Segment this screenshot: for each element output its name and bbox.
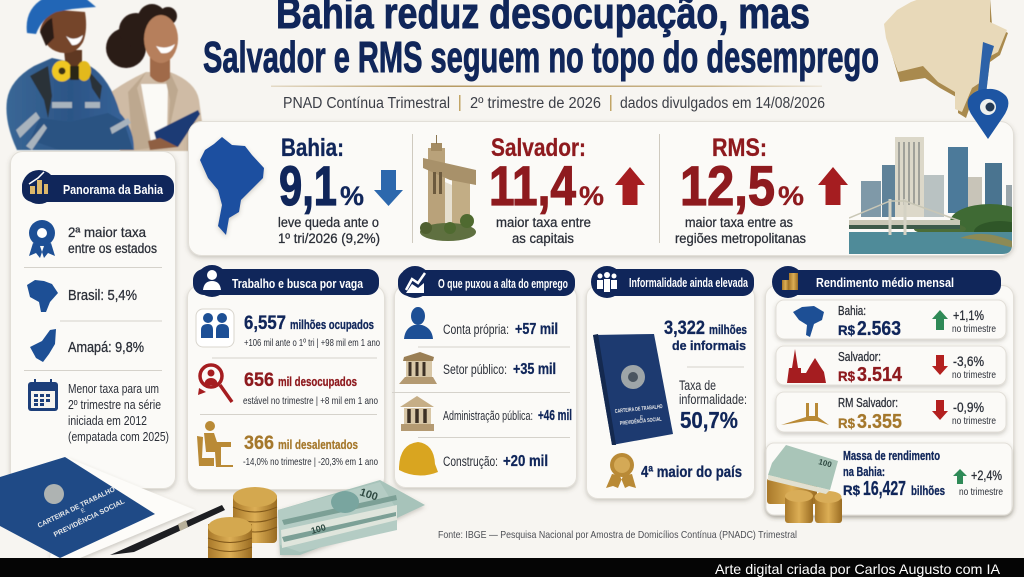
icon: Elevador Lacerda xyxy=(420,135,476,241)
stat: state ranking: entre os estados xyxy=(68,241,157,256)
note: lowest rate: iniciada em 2012 xyxy=(68,413,147,428)
Salvador rate: maior taxa entre xyxy=(496,215,591,230)
stat: informal workers: 3,322 xyxy=(664,318,705,339)
illustration: work booklet: PREVIDÊNCIA SOCIAL xyxy=(619,415,662,427)
woman hair xyxy=(106,4,177,68)
illustration: work booklet xyxy=(593,334,673,445)
icon: coins and banknotes: 100 xyxy=(817,457,833,470)
icon: employed people xyxy=(196,309,234,347)
icon: rosette xyxy=(29,220,55,258)
stat: informal workers xyxy=(664,318,747,353)
arrow down blue xyxy=(374,170,403,206)
panel: Rendimento médio mensal xyxy=(766,266,1014,523)
icon: Brazil map xyxy=(27,280,58,312)
ear muffs xyxy=(52,60,72,82)
stat: discouraged: -14,0% no trimestre | -20,3% em 1 ano xyxy=(243,456,378,468)
Bahia rate: leve queda ante o xyxy=(278,215,379,230)
heading pill xyxy=(193,265,379,297)
credit bar xyxy=(0,558,1024,577)
subtitle xyxy=(283,95,825,112)
heading pill: Panorama da Bahia xyxy=(63,182,164,197)
note: lowest rate: (empatada com 2025) xyxy=(68,429,169,444)
woman blazer xyxy=(111,72,206,151)
worker body xyxy=(6,58,134,150)
row: Construção: Construção: xyxy=(443,454,498,469)
card: Salvador income: 3.514 xyxy=(857,364,903,386)
card: income mass: no trimestre xyxy=(959,486,1003,498)
card: Bahia income xyxy=(776,300,1006,340)
stat: Brasil: Brasil: 5,4% xyxy=(68,288,137,304)
illustration: skyline xyxy=(849,137,1024,255)
illustration: pen xyxy=(110,505,225,555)
stat: informality rate: Taxa de xyxy=(679,378,716,393)
hard hat xyxy=(27,0,96,34)
RMS rate xyxy=(675,134,806,246)
row: Setor público: Setor público: xyxy=(443,362,507,377)
woman face xyxy=(150,55,170,83)
row: Conta própria xyxy=(443,321,558,338)
card: RM Salvador income: RM Salvador: xyxy=(838,396,898,410)
illustration: banknotes: 100 xyxy=(358,486,379,504)
card: RM Salvador income: 3.355 xyxy=(857,411,902,433)
subtitle: PNAD Contínua Trimestral xyxy=(283,95,450,112)
row: Administração pública: +46 mil xyxy=(538,408,572,424)
icon: Amapá map xyxy=(30,329,56,362)
Bahia rate: % xyxy=(340,181,364,211)
stat: discouraged xyxy=(243,433,378,468)
icon: discouraged seated person xyxy=(197,421,233,467)
card: income mass: R$ xyxy=(843,482,860,498)
illustration: coin stacks xyxy=(208,487,277,558)
icon: medal xyxy=(606,453,636,488)
illustration: worker and professional xyxy=(6,0,206,151)
row: Setor público xyxy=(443,361,556,378)
heading pill xyxy=(591,266,754,298)
heading pill xyxy=(22,170,174,204)
arrow up red xyxy=(615,167,645,205)
heading pill: Trabalho e busca por vaga xyxy=(232,276,364,291)
note: lowest rate: 2º trimestre na série xyxy=(68,397,161,412)
icon: construction helmet xyxy=(399,442,438,476)
illustration: work booklet on desk: PREVIDÊNCIA SOCIAL xyxy=(52,496,127,539)
icon: coins and banknotes xyxy=(767,445,842,523)
row: Administração pública: Administração pública: xyxy=(443,408,533,423)
stat: unemployed: 656 xyxy=(244,370,274,391)
stat: discouraged: mil desalentados xyxy=(278,437,358,452)
card: Salvador income: no trimestre xyxy=(952,369,996,381)
card: RM Salvador income xyxy=(776,392,1006,433)
illustration: banknotes xyxy=(278,480,425,555)
heading pill: Informalidade ainda elevada xyxy=(629,275,749,290)
Bahia rate: 1º tri/2026 (9,2%) xyxy=(278,231,380,246)
stat: occupied: 6,557 xyxy=(244,313,286,334)
illustration: banknotes: 100 xyxy=(310,522,327,536)
Bahia map icon xyxy=(200,137,264,235)
card: Bahia income: +1,1% xyxy=(953,308,984,323)
card: Salvador income: R$ xyxy=(838,368,855,384)
illustration: work booklet on desk xyxy=(0,457,195,558)
stat: state ranking: 2ª maior taxa xyxy=(68,224,146,240)
RMS rate: % xyxy=(778,181,804,211)
heading pill: O que puxou a alta do emprego xyxy=(438,276,568,291)
illustration: work booklet on desk: CARTEIRA DE TRABALHO xyxy=(37,486,117,530)
card: Bahia income: Bahia: xyxy=(838,304,866,318)
stat: occupied: milhões ocupados xyxy=(290,317,374,332)
stat: unemployed: estável no trimestre | +8 mil em 1 ano xyxy=(243,395,378,407)
stat: informality rate: informalidade: xyxy=(679,392,747,407)
heading pill: Rendimento médio mensal xyxy=(816,275,954,290)
panel: Panorama da Bahia xyxy=(10,152,176,488)
Salvador rate: Salvador: xyxy=(491,134,586,162)
book xyxy=(154,110,200,147)
RMS rate: regiões metropolitanas xyxy=(675,231,806,246)
row: Conta própria: +57 mil xyxy=(515,321,558,338)
card: income mass: na Bahia: xyxy=(843,465,885,479)
Salvador rate: % xyxy=(579,181,604,211)
Bahia rate xyxy=(278,134,380,246)
card: income mass: +2,4% xyxy=(971,468,1002,483)
icon: search person xyxy=(198,365,232,402)
Salvador rate xyxy=(489,134,604,246)
card: income mass xyxy=(766,443,1012,523)
card: income mass: bilhões xyxy=(911,483,945,498)
stat: occupied: +106 mil ante o 1º tri | +98 mil em 1 ano xyxy=(244,337,380,349)
credit bar: Arte digital criada por Carlos Augusto com IA xyxy=(715,561,1001,577)
note: lowest rate: Menor taxa para um xyxy=(68,381,159,396)
RMS rate: maior taxa entre as xyxy=(685,215,793,230)
subtitle: dados divulgados em 14/08/2026 xyxy=(620,95,825,112)
Bahia rate: 9,1 xyxy=(279,154,337,217)
illustration: work booklet on desk: E xyxy=(80,508,86,515)
stat: informal workers: milhões xyxy=(709,322,747,337)
source note: Fonte: IBGE — Pesquisa Nacional por Amostra de Domicílios Contínua (PNADC) Trimestral xyxy=(438,529,797,541)
panel: headline rates xyxy=(188,122,1024,256)
stat: informality rate: 50,7% xyxy=(680,407,738,433)
card: income mass: Massa de rendimento xyxy=(843,449,940,463)
Salvador rate: 11,4 xyxy=(489,154,576,217)
stat: discouraged: 366 xyxy=(244,433,274,454)
stat: occupied xyxy=(244,313,380,349)
icon: public sector building xyxy=(399,352,437,384)
icon: public administration building xyxy=(400,396,434,431)
panel: O que puxou a alta do emprego xyxy=(392,266,576,488)
illustration: Bahia 3D map with pin xyxy=(884,0,1008,139)
card: RM Salvador income: -0,9% xyxy=(953,400,984,415)
illustration: work booklet: E xyxy=(640,415,644,421)
card: Bahia income: no trimestre xyxy=(952,323,996,335)
icon: self-employed person xyxy=(404,307,433,339)
stat: unemployed xyxy=(243,370,378,407)
location pin xyxy=(968,89,1008,139)
RMS rate: 12,5 xyxy=(680,154,775,217)
note: lowest rate xyxy=(68,381,169,444)
panel: Informalidade ainda elevada xyxy=(586,266,754,498)
arrow up red xyxy=(818,167,848,205)
stat: state ranking xyxy=(68,224,157,256)
subtitle: 2º trimestre de 2026 xyxy=(470,95,601,112)
RMS rate: RMS: xyxy=(712,134,767,162)
stat: rank: 4ª maior do país xyxy=(641,464,742,481)
row: Construção xyxy=(443,453,548,470)
row: Conta própria: Conta própria: xyxy=(443,322,509,337)
panel: Trabalho e busca por vaga xyxy=(188,265,384,490)
Salvador rate: as capitais xyxy=(512,231,574,246)
card: Salvador income xyxy=(776,346,1006,386)
title xyxy=(203,0,879,82)
heading pill xyxy=(772,266,1001,298)
title rule xyxy=(271,86,822,87)
illustration: work booklet: CARTEIRA DE TRABALHO xyxy=(615,404,663,415)
stat: unemployed: mil desocupados xyxy=(278,374,357,389)
stat: Amapá: Amapá: 9,8% xyxy=(68,340,144,356)
card: RM Salvador income: no trimestre xyxy=(952,415,996,427)
icon: calendar xyxy=(28,379,58,411)
card: Bahia income: 2.563 xyxy=(857,318,901,340)
row: Setor público: +35 mil xyxy=(513,361,556,378)
card: Salvador income: Salvador: xyxy=(838,350,881,364)
card: Salvador income: -3,6% xyxy=(953,354,984,369)
card: RM Salvador income: R$ xyxy=(838,415,855,431)
Bahia rate: Bahia: xyxy=(281,134,344,162)
stat: informal workers: de informais xyxy=(672,338,746,353)
card: income mass: 16,427 xyxy=(863,478,906,500)
worker head xyxy=(64,50,82,70)
stat: informality rate xyxy=(679,378,747,433)
heading pill xyxy=(398,266,575,298)
row: Construção: +20 mil xyxy=(503,453,548,470)
card: Bahia income: R$ xyxy=(838,322,855,338)
